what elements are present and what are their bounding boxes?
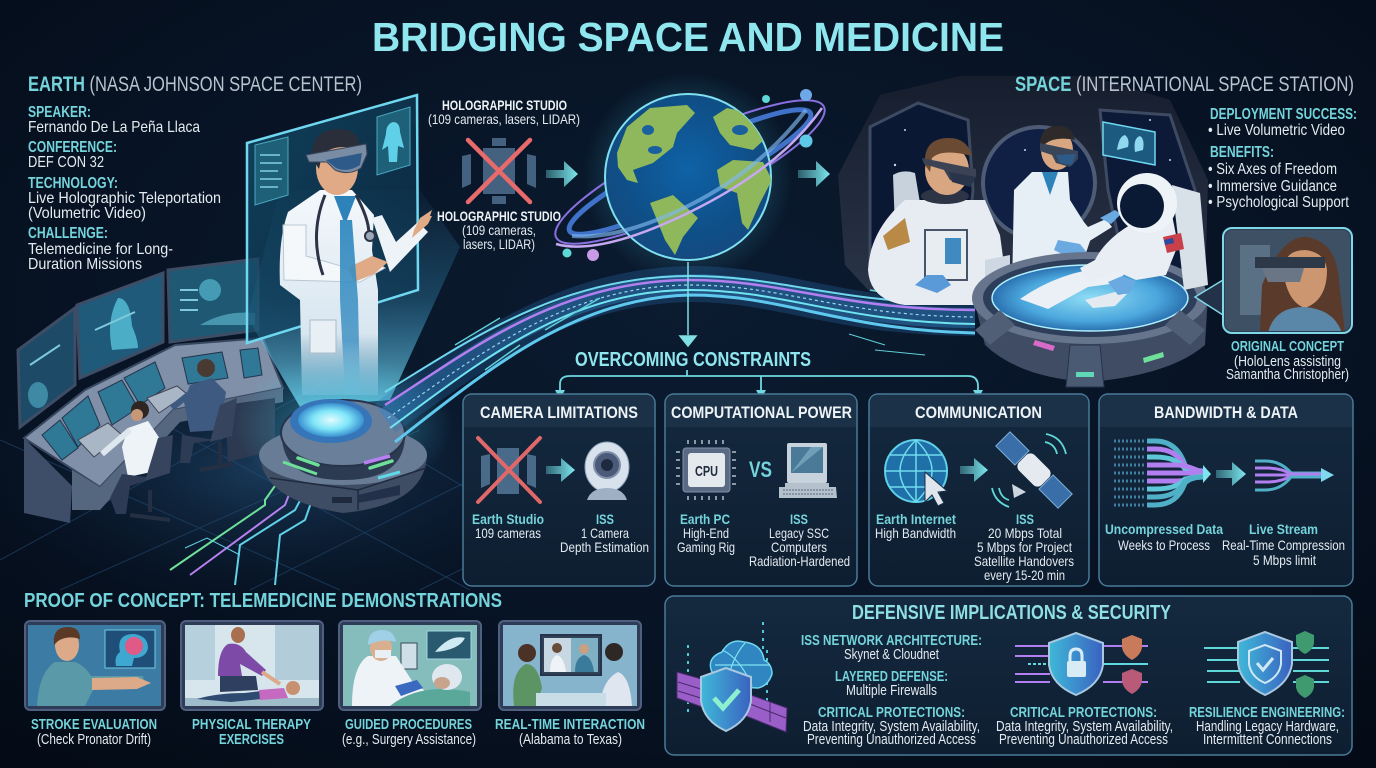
space info list: • Immersive Guidance [1208, 178, 1337, 195]
section heading: proof of concept: PROOF OF CONCEPT: TELEMEDICINE DEMONSTRATIONS [24, 590, 502, 612]
security text column one: CRITICAL PROTECTIONS: [818, 705, 965, 721]
panel: communication: High Bandwidth [875, 525, 956, 541]
icon: internet globe [885, 440, 947, 506]
card: stroke evaluation [25, 621, 165, 710]
icon: crossed out studio [462, 138, 536, 204]
panel: camera limitations [463, 394, 655, 586]
icon: firewall and cloud [677, 622, 787, 732]
panel: communication [869, 394, 1089, 586]
card captions: GUIDED PROCEDURES [345, 716, 472, 733]
panel: defensive implications and security [665, 596, 1352, 755]
arrow: studio to globe [546, 161, 578, 187]
icon: check shield [1204, 631, 1329, 698]
holographic studio labels: HOLOGRAPHIC STUDIO [442, 97, 567, 113]
security text column two: Preventing Unauthorized Access [999, 732, 1168, 748]
panel: bandwidth and data: Uncompressed Data [1105, 521, 1223, 537]
icon: padlock shield [1015, 633, 1148, 695]
panel: communication: COMMUNICATION [915, 403, 1042, 422]
security text column one: Data Integrity, System Availability, [803, 719, 980, 735]
vs label: VS [749, 457, 772, 482]
arrow [960, 458, 988, 482]
card captions: EXERCISES [219, 731, 284, 748]
space info list: BENEFITS: [1210, 144, 1274, 161]
panel: camera limitations: ISS [596, 511, 614, 527]
panel: communication: 5 Mbps for Project [977, 539, 1072, 555]
security text column two [996, 705, 1173, 748]
earth info list: Telemedicine for Long- [28, 241, 173, 258]
icon: satellite [992, 431, 1073, 509]
original concept inset [1195, 228, 1352, 333]
panel: computational power: ISS [790, 511, 808, 527]
earth info list: SPEAKER: [28, 104, 91, 121]
panel: computational power: Radiation-Hardened [749, 553, 850, 569]
security text column one: Multiple Firewalls [846, 683, 937, 699]
panel: bandwidth and data [1099, 394, 1353, 586]
earth info list: Fernando De La Peña Llaca [28, 119, 200, 136]
panel: computational power [665, 394, 857, 586]
original concept caption: (HoloLens assisting [1234, 354, 1341, 370]
security text column one: Preventing Unauthorized Access [807, 732, 976, 748]
hologram panel [247, 95, 418, 343]
panel: communication: 20 Mbps Total [988, 525, 1062, 541]
control console [18, 259, 283, 523]
panel: camera limitations: 109 cameras [475, 525, 541, 541]
card captions: REAL-TIME INTERACTION [495, 716, 645, 733]
panel: camera limitations: CAMERA LIMITATIONS [480, 403, 638, 422]
panel: bandwidth and data: Weeks to Process [1118, 537, 1210, 553]
icon: cpu [676, 440, 736, 500]
hologram platform in station [972, 252, 1208, 387]
card: physical therapy [181, 621, 323, 710]
icon: compressed stream [1255, 461, 1334, 490]
holographic studio labels: HOLOGRAPHIC STUDIO [437, 208, 561, 224]
icon: cpu: CPU [695, 463, 718, 480]
data stream ribbon [385, 276, 975, 442]
holographic studio labels: (109 cameras, lasers, LIDAR) [428, 111, 580, 127]
panel: computational power: Legacy SSC [769, 525, 829, 541]
icon: crossed camera rig [478, 438, 540, 502]
panel: computational power: COMPUTATIONAL POWER [671, 403, 852, 422]
earth info list: Duration Missions [28, 256, 142, 273]
space station interior [838, 76, 1208, 300]
original concept caption: ORIGINAL CONCEPT [1231, 339, 1344, 355]
space info list: • Live Volumetric Video [1208, 122, 1345, 139]
security text column three: Handling Legacy Hardware, [1196, 719, 1339, 735]
icon: webcam [585, 442, 629, 500]
holographic studio labels: lasers, LIDAR) [463, 236, 535, 252]
original concept caption: Samantha Christopher) [1226, 367, 1349, 383]
section heading: overcoming constraints: OVERCOMING CONSTRAINTS [575, 349, 811, 371]
panel: bandwidth and data: BANDWIDTH & DATA [1154, 403, 1298, 422]
panel: camera limitations: 1 Camera [581, 525, 629, 541]
desk screens [42, 348, 262, 460]
panel: communication: ISS [1016, 511, 1034, 527]
panel: computational power: Earth PC [680, 511, 730, 527]
earth heading: EARTH (NASA JOHNSON SPACE CENTER) [28, 73, 362, 96]
space info list [1208, 106, 1357, 211]
operator seated back [172, 359, 237, 470]
title: BRIDGING SPACE AND MEDICINE [372, 14, 1004, 60]
globe with orbit [554, 81, 826, 270]
small holo screen [1103, 122, 1155, 165]
astronaut with headset [868, 138, 1010, 305]
panel: camera limitations: Depth Estimation [560, 539, 649, 555]
panel: communication: Earth Internet [876, 511, 956, 527]
panel: computational power: Computers [771, 539, 827, 555]
card captions: (e.g., Surgery Assistance) [342, 731, 476, 748]
arrow: globe to constraints [680, 262, 696, 346]
card: real-time interaction [499, 621, 641, 710]
connector to constraint panels [555, 370, 983, 399]
security text column three: Intermittent Connections [1203, 732, 1332, 748]
space info list: • Psychological Support [1208, 194, 1350, 211]
operator seated front [102, 401, 173, 520]
holographic studio labels [428, 97, 580, 252]
card captions [31, 716, 645, 748]
security text column one: Skynet & Cloudnet [844, 647, 939, 663]
card captions: STROKE EVALUATION [31, 716, 157, 733]
panel: defensive implications and security: DEFENSIVE IMPLICATIONS & SECURITY [852, 602, 1172, 624]
arrow [546, 458, 575, 482]
holographic projection beam [247, 190, 460, 407]
earth info list: TECHNOLOGY: [28, 175, 118, 192]
panel: bandwidth and data: Real-Time Compression [1222, 537, 1345, 553]
security text column one: ISS NETWORK ARCHITECTURE: [801, 633, 982, 649]
earth info list [28, 104, 221, 273]
security text column one [801, 633, 982, 748]
earth info list: Live Holographic Teleportation [28, 190, 221, 207]
earth info list: CONFERENCE: [28, 139, 117, 156]
desk [24, 338, 283, 487]
card captions: (Check Pronator Drift) [37, 731, 151, 748]
panel: camera limitations: Earth Studio [472, 511, 544, 527]
earth info list: (Volumetric Video) [28, 205, 146, 222]
security text column two: Data Integrity, System Availability, [996, 719, 1173, 735]
panel: bandwidth and data: 5 Mbps limit [1253, 552, 1316, 568]
monitor bank [18, 259, 258, 427]
doctor hologram figure [280, 129, 432, 395]
patient attending astronaut [1080, 173, 1208, 295]
arrow: globe to station [798, 161, 830, 187]
panel: communication: Satellite Handovers [974, 553, 1074, 569]
card: guided procedures [339, 621, 481, 710]
circuit traces [170, 483, 313, 585]
earth info list: CHALLENGE: [28, 225, 108, 242]
panel: bandwidth and data: Live Stream [1249, 521, 1318, 537]
space info list: • Six Axes of Freedom [1208, 161, 1337, 178]
icon: legacy computer [779, 443, 837, 498]
security text column three [1189, 705, 1345, 748]
panel: computational power: High-End [683, 525, 729, 541]
card captions: PHYSICAL THERAPY [192, 716, 311, 733]
security text column two: CRITICAL PROTECTIONS: [1010, 705, 1157, 721]
panel: communication: every 15-20 min [984, 567, 1065, 583]
security text column one: LAYERED DEFENSE: [835, 669, 948, 685]
icon: uncompressed streams [1114, 441, 1211, 505]
holographic studio labels: (109 cameras, [462, 222, 536, 238]
card captions: (Alabama to Texas) [519, 731, 622, 748]
arrow [1216, 462, 1246, 486]
hologram base platform [233, 355, 453, 513]
earth info list: DEF CON 32 [28, 154, 104, 171]
original concept caption [1226, 339, 1349, 383]
doctor on station [1012, 126, 1121, 290]
panel: computational power: Gaming Rig [677, 539, 735, 555]
